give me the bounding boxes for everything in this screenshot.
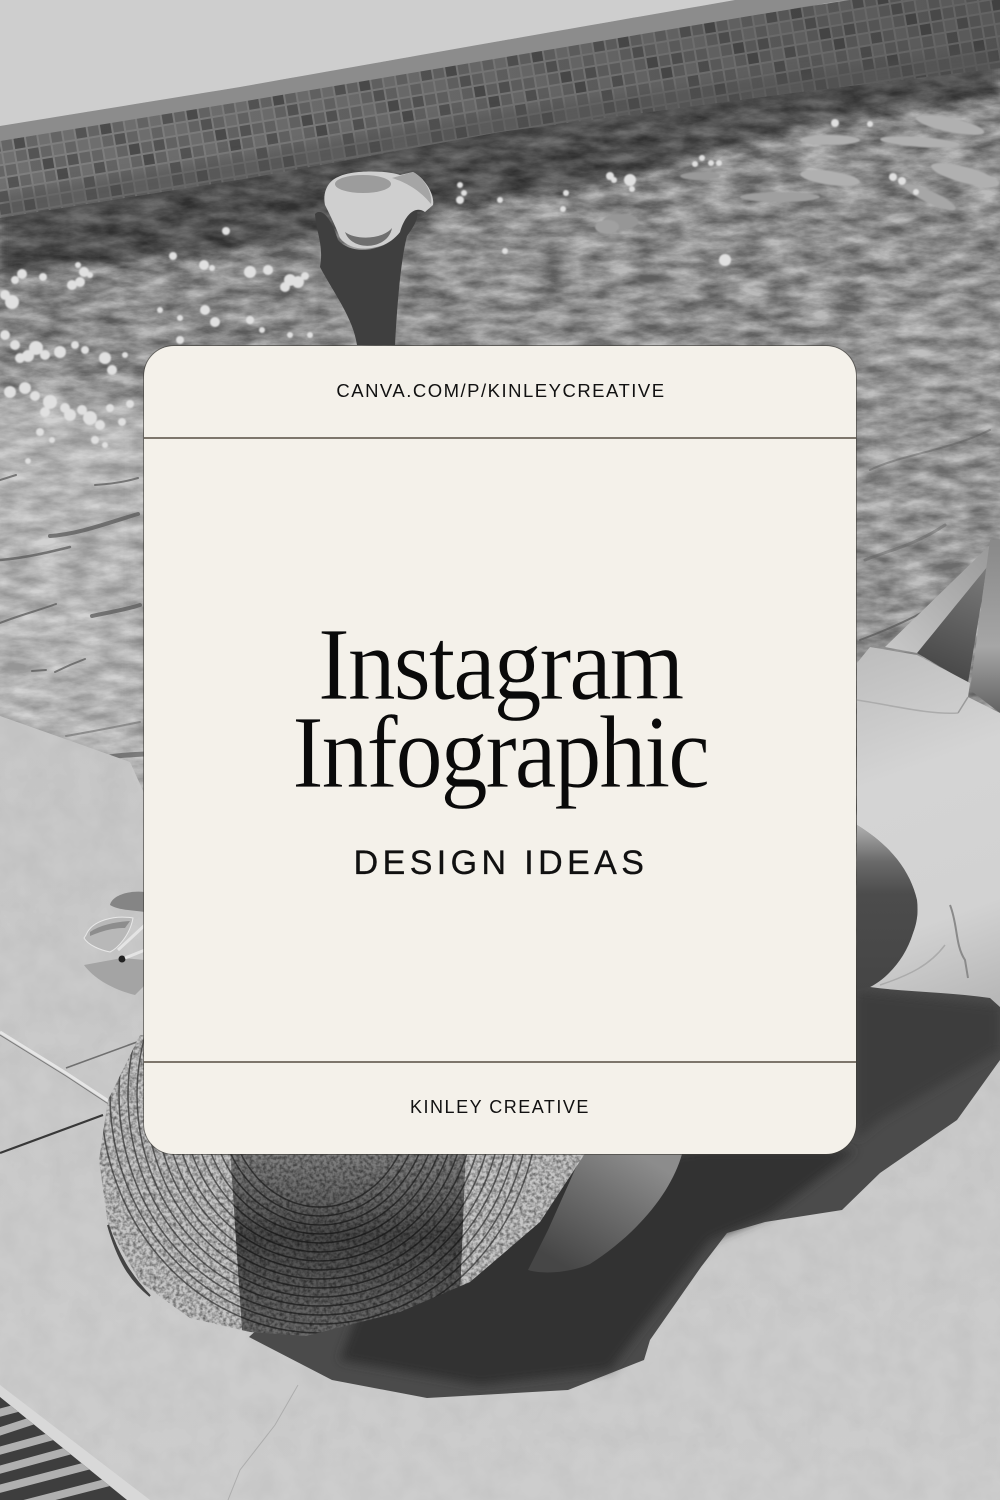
hat shadow band (230, 1150, 466, 1345)
arm under the hat (528, 1154, 682, 1272)
shorts folds (857, 697, 968, 985)
title line: Instagram: Instagram (318, 607, 682, 722)
drain grate (0, 1385, 150, 1500)
water surface (0, 0, 1000, 1100)
deck joints and cracks (0, 1032, 298, 1500)
hand holding a glass (315, 171, 433, 345)
straw hat (99, 1035, 584, 1336)
pool tile band (0, 0, 1000, 222)
sunglasses on the deck (84, 892, 145, 995)
thigh in shadow (856, 825, 918, 990)
hat cast shadow on the deck (108, 1225, 150, 1296)
main card (144, 346, 856, 1154)
brand name: KINLEY CREATIVE (410, 1097, 590, 1117)
concrete deck behind the pool (0, 0, 735, 126)
sun sparkles on the water (0, 119, 919, 464)
body shadow on the deck (249, 985, 1000, 1398)
light ripples at upper right (595, 111, 1000, 234)
concrete deck in the foreground (0, 716, 1000, 1500)
subtitle: DESIGN IDEAS (354, 844, 648, 882)
water streaks (0, 430, 990, 760)
white shorts (857, 647, 1000, 1007)
legs (885, 540, 1000, 713)
pool coping (0, 0, 845, 141)
url text: CANVA.COM/P/KINLEYCREATIVE (336, 380, 666, 401)
title line: Infographic: Infographic (292, 695, 708, 810)
